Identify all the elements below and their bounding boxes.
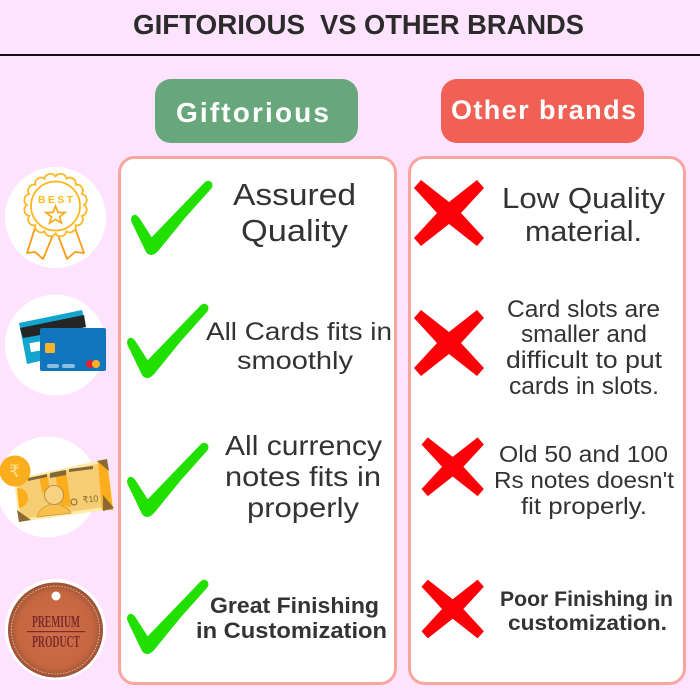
heading: Giftorious badge: Giftorious (176, 97, 329, 128)
icon: check mark row 2 (127, 304, 208, 378)
icon: currency note (0, 436, 114, 538)
text: poor finishing (500, 588, 673, 635)
heading: Other brands badge: Other brands (451, 95, 636, 125)
text: all currency notes fit: notes fits in (225, 461, 381, 492)
icon: cross row 4 (422, 580, 484, 638)
text: low quality material: Low Quality (502, 183, 666, 215)
text: card slots smaller: Card slots are (507, 296, 660, 323)
text: old notes: Old 50 and 100 (499, 441, 668, 467)
icon: check mark row 4 (127, 580, 208, 654)
text: assured quality: Assured (233, 177, 356, 212)
panel: Other brands column (410, 158, 684, 684)
icon: best quality medal (5, 167, 106, 268)
title: VS OTHER BRANDS (320, 9, 584, 40)
text: old notes: Rs notes doesn't (494, 467, 675, 493)
icon: currency note: ₹10 (82, 493, 99, 505)
icon: cross row 2 (414, 310, 484, 376)
text: old notes: fit properly. (521, 493, 647, 519)
text: poor finishing: Poor Finishing in (500, 588, 673, 611)
text: card slots smaller: cards in slots. (509, 373, 659, 400)
icon: cross row 1 (414, 180, 484, 246)
text: card slots smaller (506, 296, 662, 400)
icon: check mark row 1 (131, 181, 212, 255)
heading: Other brands badge (441, 79, 644, 143)
text: low quality material: material. (525, 216, 642, 248)
text: all currency notes fit (225, 430, 382, 523)
text: assured quality (233, 177, 356, 248)
icon: premium product leather tag (5, 579, 106, 680)
text: great finishing: Great Finishing (210, 593, 379, 618)
heading: Giftorious badge (155, 79, 358, 143)
text: card slots smaller: smaller and (521, 321, 647, 348)
icon: premium product leather tag: PREMIUM (32, 612, 80, 631)
icon: premium product leather tag: PRODUCT (32, 632, 80, 651)
text: card slots smaller: difficult to put (506, 347, 662, 374)
text: all currency notes fit: All currency (225, 430, 382, 461)
icon: check mark row 3 (127, 443, 208, 517)
text: all cards fit: smoothly (237, 347, 354, 375)
title: GIFTORIOUS (133, 9, 305, 40)
title (133, 9, 584, 40)
panel: Giftorious column (120, 158, 396, 684)
text: all currency notes fit: properly (247, 492, 359, 523)
text: poor finishing: customization. (508, 612, 667, 635)
text: all cards fit (206, 318, 392, 375)
icon: credit cards (5, 294, 106, 396)
text: assured quality: Quality (241, 213, 349, 248)
icon: cross row 3 (422, 437, 484, 496)
text: great finishing (196, 593, 387, 643)
text: all cards fit: All Cards fits in (206, 318, 392, 346)
icon: currency note: ₹ (9, 462, 20, 481)
text: great finishing: in Customization (196, 618, 387, 643)
icon: best quality medal: BEST (38, 194, 74, 206)
text: low quality material (502, 183, 666, 248)
text: old notes (494, 441, 675, 519)
